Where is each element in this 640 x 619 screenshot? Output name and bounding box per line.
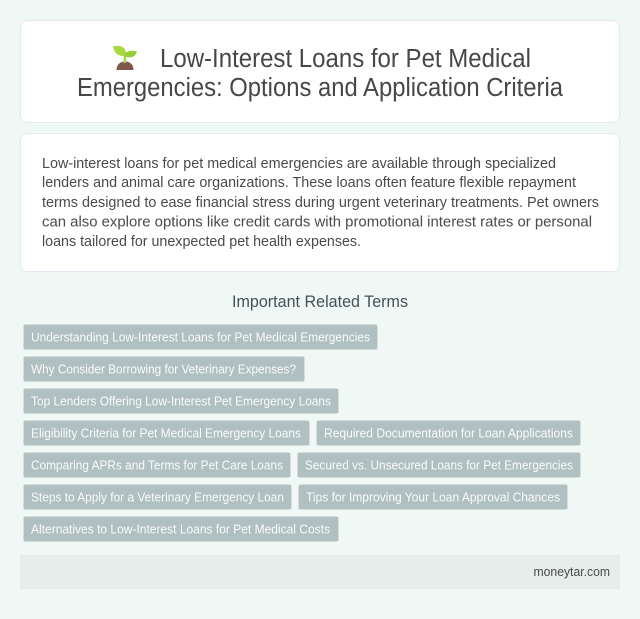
tag (24, 516, 338, 542)
tag (298, 452, 580, 478)
heading: related terms: Important Related Terms (232, 293, 408, 311)
summary text: terms designed to ease financial stress during urgent veterinary treatments. Pet owners (42, 194, 599, 211)
summary text: can also explore options like credit cards with promotional interest rates or personal (42, 214, 592, 230)
tag: Comparing APRs and Terms for Pet Care Loans (31, 458, 283, 472)
panel: summary (20, 134, 620, 272)
tag: Eligibility Criteria for Pet Medical Emergency Loans (31, 426, 301, 440)
tag (298, 484, 568, 510)
tag: Why Consider Borrowing for Veterinary Expenses? (31, 362, 296, 376)
title (77, 45, 564, 102)
tag: Understanding Low-Interest Loans for Pet Medical Emergencies (31, 330, 370, 344)
tag group: related terms (24, 324, 580, 542)
tag: Tips for Improving Your Loan Approval Chances (306, 490, 560, 504)
title: Low-Interest Loans for Pet Medical (160, 45, 531, 73)
tag (24, 420, 310, 446)
footer (20, 555, 620, 589)
summary text: loans tailored for unexpected pet health expenses. (42, 233, 361, 250)
summary text: Low-interest loans for pet medical emergencies are available through specialized (42, 155, 556, 172)
icon: sprout (113, 46, 137, 70)
summary text: lenders and animal care organizations. These loans often feature flexible repayment (42, 174, 577, 191)
tag: Secured vs. Unsecured Loans for Pet Emergencies (305, 458, 573, 472)
tag: Alternatives to Low-Interest Loans for Pet Medical Costs (31, 522, 330, 536)
panel: header (20, 20, 620, 122)
tag: Top Lenders Offering Low-Interest Pet Emergency Loans (31, 394, 331, 408)
tag (24, 388, 338, 414)
title: Emergencies: Options and Application Criteria (77, 74, 564, 102)
tag: Steps to Apply for a Veterinary Emergency Loan (31, 490, 284, 504)
tag (24, 356, 304, 382)
tag (24, 324, 378, 350)
tag (316, 420, 580, 446)
tag (24, 484, 292, 510)
summary text (42, 155, 599, 250)
tag: Required Documentation for Loan Applications (324, 426, 573, 440)
footer: moneytar.com (534, 564, 610, 579)
tag (24, 452, 290, 478)
